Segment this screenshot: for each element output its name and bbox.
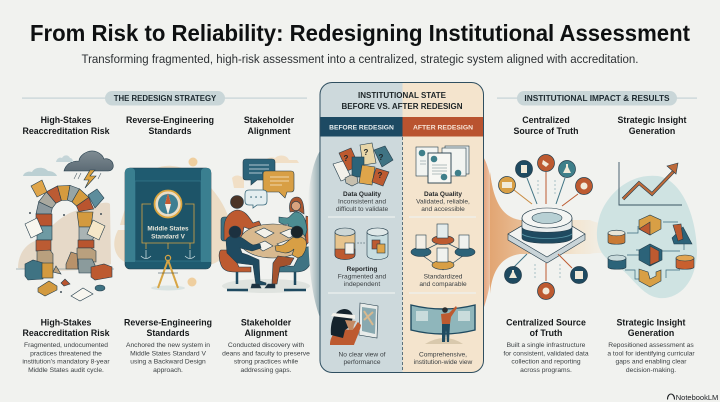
caption: source of truth: of Truth [530,328,562,338]
text: reporting after: Standardized [424,274,463,280]
caption: alignment: Stakeholder [241,318,292,328]
caption: alignment: deans and faculty to preserve [222,350,310,358]
text: data quality before: Inconsistent and [338,198,386,206]
illustration: standards blueprint scroll: Standard V [151,234,186,240]
speech bubbles [243,159,294,208]
illustration: stakeholder meeting [219,156,313,293]
text: data quality after: and accessible [421,206,465,213]
panel: before vs after: ? [378,171,383,180]
text: performance before: performance [343,359,381,366]
caption: risk: Middle States audit cycle. [28,367,104,374]
caption: standards: approach. [153,367,183,374]
caption: alignment [222,318,310,374]
caption: source of truth: for consistent, validated data [503,350,589,358]
caption: standards: Standards [146,328,190,338]
caption: standards: Middle States Standard V [130,350,206,358]
icon: panoramic dashboard [411,305,475,344]
text: performance before: No clear view of [339,352,386,358]
heading: risk: High-Stakes [41,115,92,125]
caption: source of truth [503,318,589,374]
column header: after: AFTER REDESIGN [413,124,473,132]
text: data quality before: Data Quality [343,191,381,198]
text: reporting after: and comparable [419,281,467,288]
panel: before vs after: ? [379,153,384,162]
caption: standards [124,318,212,374]
text: data quality after [416,191,470,213]
heading: risk [22,115,110,136]
caption: source of truth: Centralized Source [506,318,586,328]
connector: right flow out of panel [482,155,495,310]
text: reporting after [419,274,467,288]
title: From Risk to Reliability: Redesigning Institutional Assessment [30,20,690,46]
illustration: insight blob and charts [597,162,697,298]
illustration: centralized hub [498,154,592,300]
caption: source of truth: collection and reporting [511,358,581,366]
heading: standards [126,115,214,136]
text: reporting before [338,266,387,288]
text: performance after [414,352,473,366]
text: reporting before: Fragmented and [338,274,387,280]
text: performance after: Comprehensive, [419,352,467,358]
section header: the redesign strategy [22,91,307,106]
heading: insight: Generation [629,126,675,136]
caption: insight: Strategic Insight [617,318,686,328]
panel title: INSTITUTIONAL STATE [358,91,447,100]
heading: source of truth: Source of Truth [513,126,579,136]
icon: standardized network [411,224,475,270]
heading: standards: Reverse-Engineering [126,115,214,125]
icon: separate databases [335,228,388,260]
illustration: standards blueprint scroll [114,158,239,290]
caption: alignment: Alignment [244,328,288,338]
panel: before vs after: ? [344,154,349,163]
connector: left flow into panel [308,148,322,322]
illustration: standards blueprint scroll: Middle States [147,226,189,232]
section header: impact and results: INSTITUTIONAL IMPACT & RESULTS [524,93,670,103]
caption: insight: decision-making. [626,367,676,374]
panel title [341,91,463,111]
panel: before vs after: ? [364,148,369,157]
caption: alignment: Conducted discovery with [228,342,304,349]
caption: alignment: strong practices while [234,358,298,366]
caption: risk: institution's mandatory 8-year [22,358,110,366]
text: data quality before [336,191,388,213]
caption: source of truth: across programs. [520,367,572,374]
caption: insight: a tool for identifying curricular [607,350,695,358]
text: data quality after: Data Quality [424,191,462,198]
heading: source of truth [513,115,579,136]
caption: risk [22,318,110,374]
caption: standards: using a Backward Design [130,358,206,366]
logo: NotebookLM: NotebookLM [676,393,718,402]
text: data quality before: difficult to validate [336,206,388,213]
caption: standards: Anchored the new system in [126,342,210,349]
text: performance after: institution-wide view [414,359,473,366]
heading: risk: Reaccreditation Risk [22,126,110,136]
text: performance before [339,352,386,366]
subtitle: Transforming fragmented, high-risk assessment into a centralized, strategic system aligned with accreditation. [82,52,638,66]
text: reporting before: independent [344,281,380,288]
heading: standards: Standards [148,126,192,136]
flow band behind hub [490,172,614,294]
icon: blindfolded viewer [330,303,378,345]
heading: alignment [244,115,295,136]
heading: insight [618,115,687,136]
heading: alignment: Alignment [247,126,291,136]
column header: before: BEFORE REDESIGN [329,124,394,132]
section header: impact and results [497,91,697,106]
caption: alignment: addressing gaps. [241,367,292,374]
caption: standards: Reverse-Engineering [124,318,212,328]
heading: insight: Strategic Insight [618,115,687,125]
caption: insight: Generation [628,328,674,338]
text: data quality after: Validated, reliable, [416,198,470,206]
caption: risk: High-Stakes [41,318,92,328]
caption: risk: Reaccreditation Risk [22,328,110,338]
panel: before vs after [320,82,484,372]
caption: insight: Repositioned assessment as [608,342,694,349]
heading: alignment: Stakeholder [244,115,295,125]
heading: source of truth: Centralized [522,115,570,125]
icon: validated documents [416,146,469,183]
caption: insight: gaps and enabling clear [615,358,687,366]
caption: insight [607,318,695,374]
section header: the redesign strategy: THE REDESIGN STRATEGY [114,94,217,103]
text: reporting before: Reporting [347,266,377,273]
caption: source of truth: Built a single infrastructure [507,342,586,349]
panel title: BEFORE VS. AFTER REDESIGN [341,102,463,111]
caption: risk: practices threatened the [30,350,102,358]
illustration: crumbling arch [16,151,114,301]
icon: scattered question documents [333,143,393,186]
caption: risk: Fragmented, undocumented [24,342,108,349]
